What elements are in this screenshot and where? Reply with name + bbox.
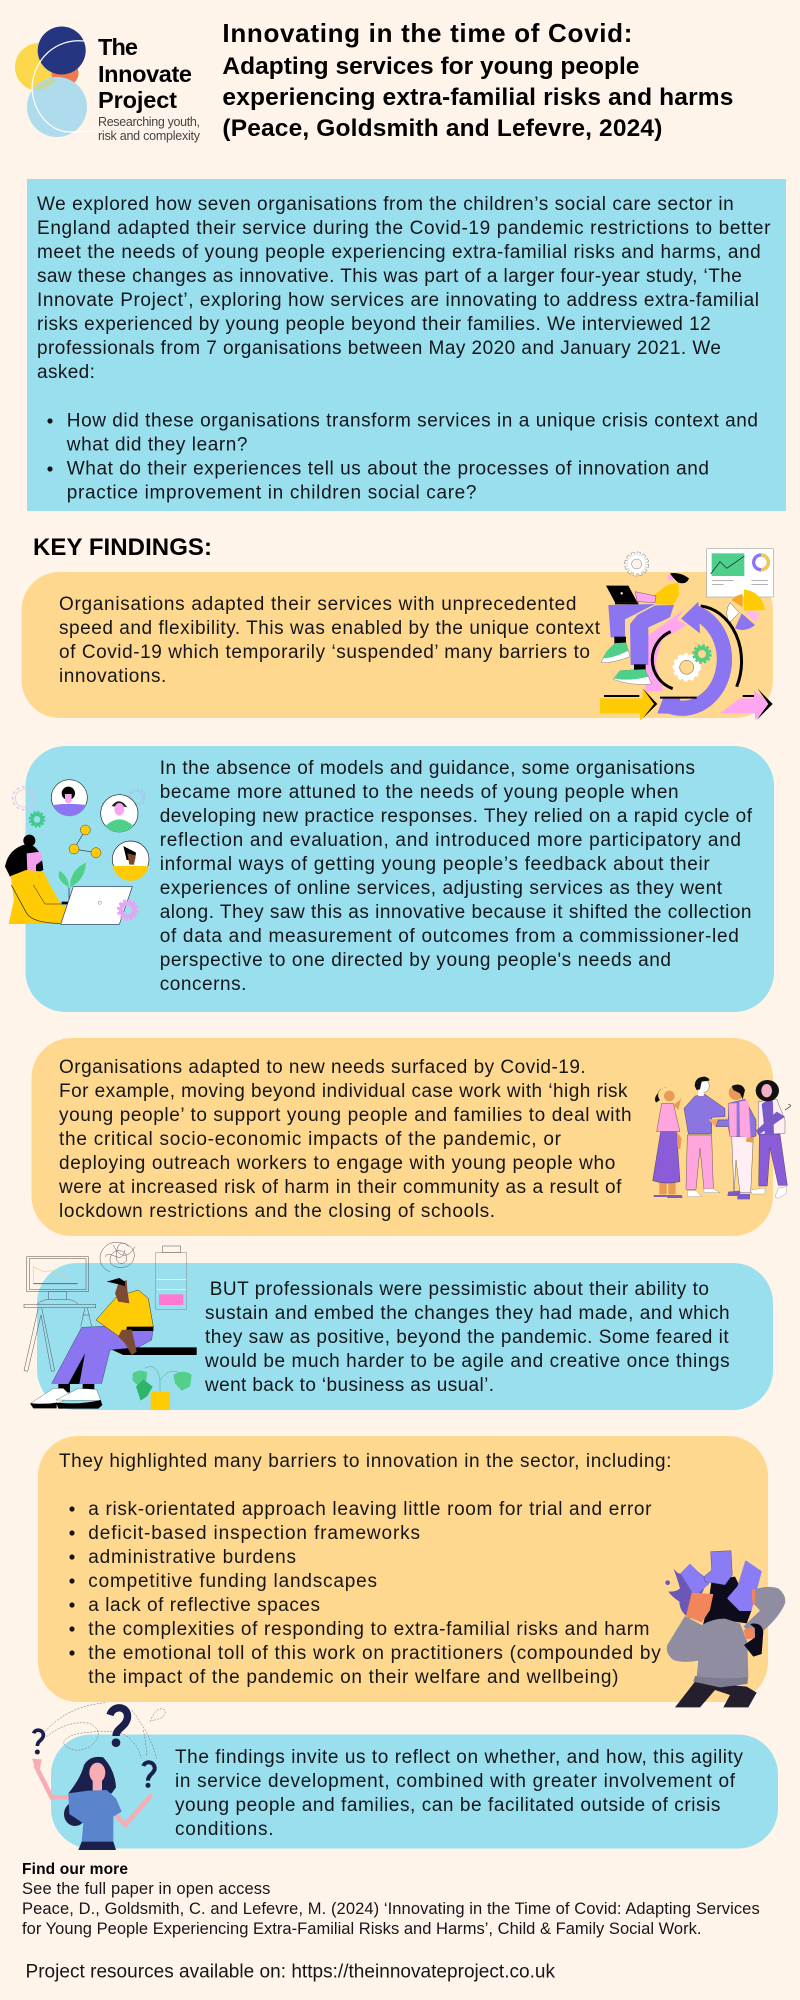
panel: introduction: professionals from 7 organisations between May 2020 and January 2021. We <box>37 338 721 359</box>
panel: finding 1: innovations. <box>59 666 166 687</box>
title: experiencing extra-familial risks and harms <box>222 84 733 111</box>
panel: conclusion <box>51 1734 778 1848</box>
project resources link: Project resources available on: https://theinnovateproject.co.uk <box>26 1962 556 1982</box>
footer: find out more and citation: Peace, D., Goldsmith, C. and Lefevre, M. (2024) ‘Innovating in the Time of Covid: Adapting Services <box>22 1900 760 1918</box>
panel: finding 4: went back to ‘business as usual’. <box>204 1375 494 1396</box>
icon: person on laptop with cycle arrows <box>600 549 773 721</box>
footer: find out more and citation: Find our more <box>22 1861 128 1878</box>
panel: introduction: How did these organisations transform services in a unique crisis context and <box>67 410 758 432</box>
panel: finding 3: were at increased risk of harm in their community as a result of <box>58 1177 622 1198</box>
panel: barriers to innovation: a risk-orientated approach leaving little room for trial and error <box>88 1499 652 1520</box>
panel: finding 4: sustain and embed the changes they had made, and which <box>205 1303 730 1324</box>
heading: key findings: KEY FINDINGS: <box>33 534 212 561</box>
panel: introduction: saw these changes as innovative. This was part of a larger four-year study, ‘The <box>37 266 742 287</box>
panel: introduction: England adapted their service during the Covid-19 pandemic restrictions to better <box>37 218 771 239</box>
logo: The Innovate Project: The <box>98 34 138 60</box>
panel: finding 1: speed and flexibility. This was enabled by the unique context <box>59 618 601 639</box>
panel: finding 4: they saw as positive, beyond the pandemic. Some feared it <box>205 1327 729 1348</box>
title: (Peace, Goldsmith and Lefevre, 2024) <box>222 115 662 142</box>
panel: finding 3: the critical socio-economic impacts of the pandemic, or <box>59 1129 562 1150</box>
icon: woman on laptop with young people avatars <box>5 780 149 924</box>
panel: introduction <box>27 179 786 511</box>
logo: The Innovate Project: risk and complexity <box>98 129 201 143</box>
panel: finding 3: lockdown restrictions and the closing of schools. <box>59 1201 495 1222</box>
icon: pessimistic man sitting at desk <box>24 1242 197 1410</box>
panel: barriers to innovation: a lack of reflective spaces <box>88 1595 320 1616</box>
panel: finding 1: of Covid-19 which temporarily ‘suspended’ many barriers to <box>59 642 590 663</box>
panel: introduction: asked: <box>37 362 95 383</box>
panel: introduction: risks experienced by young people beyond their families. We interviewed 12 <box>37 314 711 335</box>
panel: conclusion: conditions. <box>175 1819 274 1840</box>
logo: The Innovate Project: Innovate <box>98 61 192 87</box>
panel: finding 4: would be much harder to be agile and creative once things <box>204 1351 730 1372</box>
panel: introduction: practice improvement in children social care? <box>67 482 477 504</box>
panel: finding 2: experiences of online services, adjusting services as they went <box>160 878 723 899</box>
panel: finding 3: deploying outreach workers to engage with young people who <box>59 1153 615 1174</box>
logo: The Innovate Project: Researching youth, <box>98 115 200 129</box>
panel: finding 1 <box>22 572 773 718</box>
panel: barriers to innovation: competitive funding landscapes <box>88 1571 377 1592</box>
panel: finding 2: perspective to one directed by young people's needs and <box>160 950 671 971</box>
footer: find out more and citation: See the full paper in open access <box>22 1880 270 1898</box>
panel: finding 2 <box>26 746 774 1012</box>
panel: finding 2: became more attuned to the needs of young people when <box>160 782 679 803</box>
panel: conclusion: young people and families, can be facilitated outside of crisis <box>175 1795 720 1816</box>
title: Innovating in the time of Covid: <box>222 18 632 48</box>
icon: group of four people talking <box>653 1077 791 1199</box>
panel: barriers to innovation: administrative burdens <box>88 1547 296 1568</box>
panel: conclusion: The findings invite us to reflect on whether, and how, this agility <box>175 1747 743 1768</box>
panel: finding 2: along. They saw this as innovative because it shifted the collection <box>160 902 751 923</box>
panel: introduction: what did they learn? <box>66 434 247 456</box>
panel: barriers to innovation: deficit-based inspection frameworks <box>88 1523 420 1544</box>
panel: conclusion: in service development, combined with greater involvement of <box>175 1771 736 1792</box>
panel: barriers to innovation: the impact of the pandemic on their welfare and wellbeing) <box>88 1667 618 1688</box>
panel: finding 2: In the absence of models and guidance, some organisations <box>160 758 695 779</box>
logo: The Innovate Project: Project <box>98 87 177 113</box>
panel: introduction: Innovate Project’, exploring how services are innovating to address extra-familial <box>37 290 759 311</box>
panel: introduction: meet the needs of young people experiencing extra-familial risks and harms, and <box>37 242 761 263</box>
panel: finding 4 <box>37 1263 773 1410</box>
panel: finding 3: young people’ to support young people and families to deal with <box>59 1105 632 1126</box>
logo: The Innovate Project <box>15 26 201 143</box>
panel: finding 1: Organisations adapted their services with unprecedented <box>59 594 576 615</box>
panel: finding 2: of data and measurement of outcomes from a commissioner-led <box>160 926 739 947</box>
panel: barriers to innovation: They highlighted many barriers to innovation in the sector, including: <box>59 1451 671 1472</box>
panel: finding 4: BUT professionals were pessimistic about their ability to <box>210 1279 709 1300</box>
footer: find out more and citation: for Young People Experiencing Extra-Familial Risks and Harms’, Child & Family Social Work. <box>22 1920 702 1938</box>
title <box>222 18 733 142</box>
panel: finding 2: reflection and evaluation, and introduced more participatory and <box>160 830 741 851</box>
panel: finding 3 <box>32 1038 773 1236</box>
icon: person pushing back grasping hands <box>665 1551 785 1707</box>
title: Adapting services for young people <box>222 53 639 80</box>
footer: find out more and citation <box>22 1861 760 1938</box>
panel: finding 2: developing new practice responses. They relied on a rapid cycle of <box>160 806 753 827</box>
panel: finding 2: concerns. <box>160 974 246 995</box>
panel: finding 3: For example, moving beyond individual case work with ‘high risk <box>59 1081 628 1102</box>
panel: barriers to innovation <box>38 1436 768 1702</box>
panel: finding 2: informal ways of getting young people’s feedback about their <box>160 854 710 875</box>
panel: barriers to innovation: the emotional toll of this work on practitioners (compounded by <box>88 1643 661 1664</box>
panel: finding 3: Organisations adapted to new needs surfaced by Covid-19. <box>59 1057 586 1078</box>
panel: barriers to innovation: the complexities of responding to extra-familial risks and harm <box>88 1619 650 1640</box>
panel: introduction: We explored how seven organisations from the children’s social care sector in <box>37 194 734 215</box>
panel: introduction: What do their experiences tell us about the processes of innovation and <box>67 458 709 480</box>
icon: woman with question marks <box>32 1703 165 1850</box>
